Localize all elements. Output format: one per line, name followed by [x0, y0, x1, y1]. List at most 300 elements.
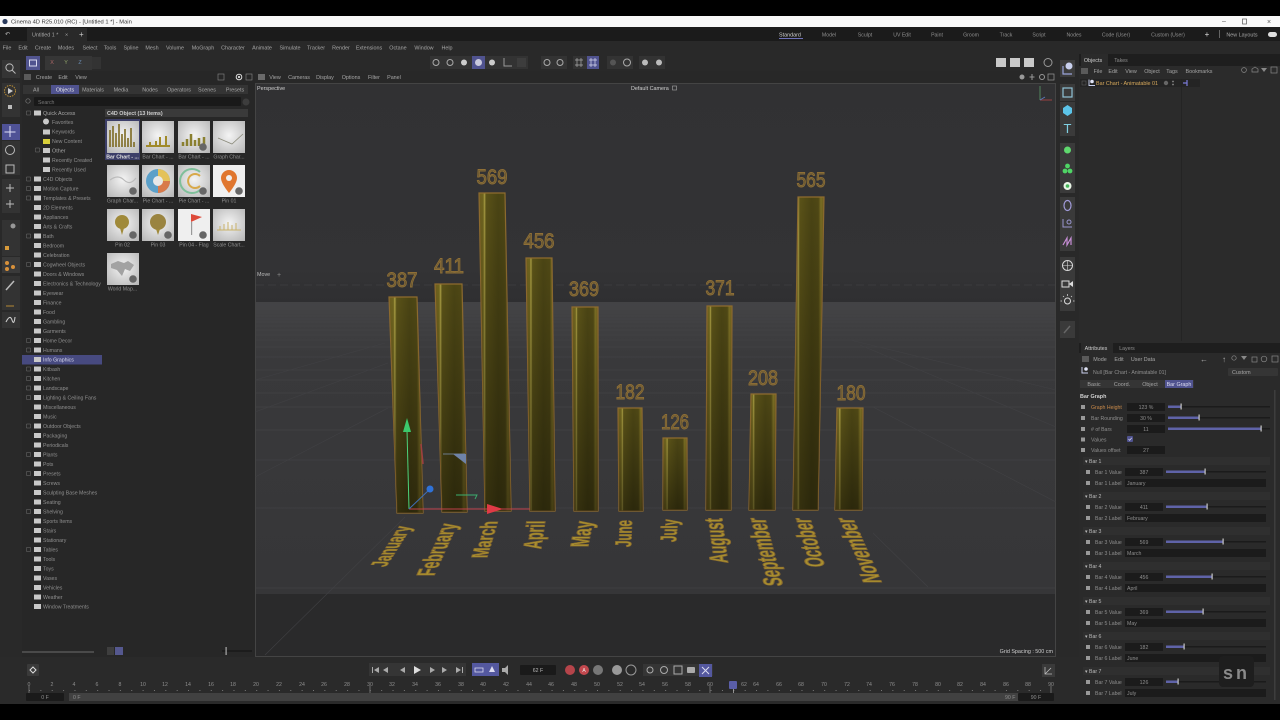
- browser header: Create: [36, 75, 52, 81]
- folder tree: Toys: [43, 566, 54, 572]
- thumbnail grid: Pie Chart - ...: [143, 198, 173, 204]
- section: Bar 4: April: [1127, 586, 1137, 592]
- attributes tabs: [1079, 343, 1280, 353]
- objects tabs: Takes: [1114, 58, 1128, 64]
- attributes menu: User Data: [1131, 357, 1155, 363]
- section: Bar 1: 387: [1140, 470, 1148, 476]
- bar graph parameters: 11: [1143, 427, 1149, 433]
- move gizmo: [403, 418, 530, 514]
- panel: viewport header: Panel: [387, 75, 401, 81]
- menu bar: Render: [332, 46, 350, 52]
- frame ruler: 50: [594, 682, 600, 688]
- scrollbar: [1274, 390, 1276, 700]
- bar values: 456: [524, 230, 554, 253]
- frame ruler: 76: [889, 682, 895, 688]
- browser tabs: Objects: [56, 88, 74, 94]
- folder tree: Food: [43, 310, 55, 316]
- menu bar: Extensions: [356, 46, 382, 52]
- bar graph parameters: [1080, 394, 1270, 454]
- section: Bar 7: ▾ Bar 7: [1085, 669, 1102, 675]
- right mode icon column: [1060, 60, 1075, 338]
- folder tree: Stationary: [43, 538, 67, 544]
- section: Bar 2: Bar 2 Label: [1095, 516, 1122, 522]
- tab and layout bar: +: [79, 30, 84, 39]
- menu bar: Mesh: [145, 46, 159, 52]
- folder tree: 2D Elements: [43, 206, 73, 212]
- frame ruler: 44: [526, 682, 532, 688]
- frame ruler: 40: [480, 682, 486, 688]
- bar graph parameters: 30 %: [1140, 416, 1152, 422]
- section: Bar 5: 369: [1140, 610, 1148, 616]
- bar: April 456: [526, 258, 555, 511]
- frame ruler: 34: [412, 682, 418, 688]
- section: Bar 1: January: [1127, 481, 1146, 487]
- objects menu: Object: [1144, 69, 1160, 75]
- objects menu: View: [1125, 69, 1137, 75]
- bar: June 182: [618, 408, 643, 511]
- panel: viewport header: [255, 71, 1055, 83]
- frame ruler: 58: [685, 682, 691, 688]
- viewport labels: Perspective: [257, 86, 285, 92]
- menu bar: [3, 46, 453, 52]
- viewport labels: Move: [257, 272, 270, 278]
- right mode icon column: T: [1064, 121, 1072, 136]
- section: Bar 6: June: [1127, 656, 1138, 662]
- browser header: [24, 74, 252, 81]
- browser toolbar: Z: [78, 60, 82, 66]
- frame ruler: 2: [51, 682, 54, 688]
- attributes menu: ←: [1200, 355, 1208, 364]
- folder tree: Vehicles: [43, 586, 63, 592]
- section: Bar 2: ▾ Bar 2: [1085, 494, 1102, 500]
- folder tree: Music: [43, 414, 57, 420]
- tab and layout bar: Groom: [963, 32, 979, 38]
- browser tabs: Presets: [226, 88, 244, 94]
- tree expander boxes: [26, 111, 40, 552]
- frame ruler: 12: [162, 682, 168, 688]
- frame ruler: 18: [230, 682, 236, 688]
- frame ruler: 8: [119, 682, 122, 688]
- browser header: Edit: [58, 75, 68, 81]
- menu bar: Window: [414, 46, 434, 52]
- menu bar: Tools: [104, 46, 117, 52]
- bar: January 387: [389, 297, 423, 513]
- month labels: [365, 518, 888, 586]
- attributes tabs: Attributes: [1085, 346, 1108, 352]
- folder tree: Vases: [43, 576, 57, 582]
- attributes menu: Edit: [1114, 357, 1124, 363]
- frame ruler: 78: [912, 682, 918, 688]
- folder tree: Cogwheel Objects: [43, 262, 86, 268]
- attribute tabs row: Coord.: [1114, 382, 1130, 388]
- watermark: [1219, 656, 1254, 687]
- section: Bar 2: February: [1127, 516, 1148, 522]
- tab and layout bar: ×: [65, 32, 68, 38]
- folder tree: Outdoor Objects: [43, 424, 81, 430]
- tab and layout bar: ↶: [5, 31, 10, 38]
- frame ruler: 60: [707, 682, 713, 688]
- section: Bar 3: ▾ Bar 3: [1085, 529, 1102, 535]
- folder tree: Kitbash: [43, 367, 60, 373]
- viewport labels: +: [277, 272, 281, 279]
- month labels: May: [565, 521, 599, 547]
- section: Bar 6: [1083, 632, 1270, 662]
- folder tree: Gambling: [43, 320, 65, 326]
- frame ruler: 6: [96, 682, 99, 688]
- section: Bar 4: [1083, 562, 1270, 592]
- watermark: sn: [1223, 663, 1250, 683]
- browser tabs: All: [33, 88, 39, 94]
- folder tree: Celebration: [43, 253, 70, 259]
- objects menu: [1081, 67, 1277, 75]
- frame ruler: 24: [299, 682, 305, 688]
- menu bar: Simulate: [280, 46, 300, 52]
- section: Bar 6: ▾ Bar 6: [1085, 634, 1102, 640]
- bar: May 369: [572, 307, 598, 511]
- left tool column: [2, 60, 20, 328]
- transport controls: 62 F: [533, 668, 543, 674]
- bar values: 369: [569, 278, 599, 301]
- frame ruler: 56: [662, 682, 668, 688]
- frame ruler: 46: [548, 682, 554, 688]
- frame ruler: 4: [73, 682, 76, 688]
- month labels: November: [829, 518, 888, 583]
- attribute tabs row: Object: [1142, 382, 1158, 388]
- folder tree: Eyewear: [43, 291, 63, 297]
- menu bar: Tracker: [307, 46, 325, 52]
- frame ruler: 88: [1025, 682, 1031, 688]
- folder tree: Recently Created: [52, 158, 92, 164]
- month labels: October: [786, 518, 831, 567]
- thumbnail grid: Pin 02: [115, 242, 130, 248]
- section: Bar 7: Bar 7 Value: [1095, 680, 1122, 686]
- browser header: View: [75, 75, 87, 81]
- section: Bar 5: ▾ Bar 5: [1085, 599, 1102, 605]
- section: Bar 5: Bar 5 Label: [1095, 621, 1122, 627]
- section: Bar 3: March: [1127, 551, 1142, 557]
- section: Bar 1: Bar 1 Label: [1095, 481, 1122, 487]
- frame ruler: 64: [753, 682, 759, 688]
- attributes menu: ↑: [1222, 355, 1226, 364]
- folder tree: Window Treatments: [43, 604, 89, 610]
- bar chart: [365, 166, 888, 586]
- title bar: [0, 16, 1280, 27]
- folder tree: Tables: [43, 548, 58, 554]
- bar graph parameters: Bar Graph: [1080, 394, 1106, 400]
- frame ruler: 66: [776, 682, 782, 688]
- orientation axis: [1040, 86, 1052, 100]
- thumbnail grid: Pin 04 - Flag: [179, 242, 209, 248]
- menu bar: Edit: [18, 46, 28, 52]
- frame range bar: [26, 693, 1054, 701]
- tab and layout bar: Paint: [931, 32, 943, 38]
- frame range bar: 0 F: [41, 695, 49, 701]
- folder tree: Garments: [43, 329, 66, 335]
- browser tabs: Operators: [167, 88, 191, 94]
- folder tree: Packaging: [43, 434, 67, 440]
- tab and layout bar: Custom (User): [1151, 32, 1185, 38]
- panel: objects manager: [1079, 54, 1280, 343]
- folder tree: Bedroom: [43, 244, 64, 250]
- menu bar: Help: [441, 46, 453, 52]
- bar values: 569: [476, 166, 508, 189]
- frame ruler: 54: [639, 682, 645, 688]
- folder tree: Landscape: [43, 386, 68, 392]
- viewport labels: [257, 86, 1053, 655]
- folder tree: Presets: [43, 472, 61, 478]
- frame ruler: 30: [367, 682, 373, 688]
- search field: [26, 97, 249, 106]
- menu bar: Animate: [252, 46, 272, 52]
- bar: July 126: [663, 438, 687, 510]
- frame ruler: 80: [935, 682, 941, 688]
- folder tree: Seating: [43, 500, 61, 506]
- panel: 3D viewport: [255, 83, 1056, 657]
- frame range bar: 0 F: [73, 695, 80, 701]
- frame ruler: 36: [435, 682, 441, 688]
- bar: November 180: [835, 408, 863, 510]
- folder tree: Lighting & Ceiling Fans: [43, 396, 97, 402]
- folder tree: New Content: [52, 139, 83, 145]
- panel: viewport header: Options: [342, 75, 361, 81]
- thumbnail grid: Scale Chart...: [213, 242, 245, 248]
- month labels: June: [611, 520, 637, 547]
- tab and layout bar: Sculpt: [858, 32, 873, 38]
- bar graph parameters: Values: [1091, 438, 1107, 444]
- title bar: –: [1222, 18, 1226, 26]
- tab and layout bar: +: [1205, 30, 1210, 39]
- month labels: March: [467, 521, 503, 558]
- folder tree: Miscellaneous: [43, 405, 76, 411]
- objects tabs: [1079, 54, 1280, 66]
- frame ruler: 0: [28, 682, 31, 688]
- frame ruler: 72: [844, 682, 850, 688]
- tab and layout bar: New Layouts: [1226, 32, 1258, 38]
- search field: Search: [38, 100, 55, 106]
- thumbnail grid: Pin 01: [222, 198, 236, 204]
- object title row: Null [Bar Chart - Animatable 01]: [1093, 370, 1167, 376]
- folder tree: Templates & Presets: [43, 196, 91, 202]
- menu bar: Octane: [389, 46, 407, 52]
- panel: viewport header: View: [269, 75, 281, 81]
- objects menu: Edit: [1108, 69, 1118, 75]
- frame ruler: 22: [276, 682, 282, 688]
- menu bar: MoGraph: [192, 46, 214, 52]
- folder icons: [34, 110, 50, 609]
- frame ruler: 14: [185, 682, 191, 688]
- frame ruler: 26: [321, 682, 327, 688]
- frame ruler: 48: [571, 682, 577, 688]
- folder tree: Periodicals: [43, 443, 69, 449]
- bottom letterbox: [0, 704, 1280, 720]
- folder tree: Shelving: [43, 510, 63, 516]
- browser toolbar: X: [50, 60, 54, 66]
- thumbnail grid: Pin 03: [151, 242, 165, 248]
- folder tree: Other: [52, 148, 66, 154]
- thumbnail grid: Pie Chart - ...: [179, 198, 209, 204]
- section: Bar 6: Bar 6 Value: [1095, 645, 1122, 651]
- tab and layout bar: Untitled 1 *: [32, 32, 59, 38]
- folder tree: Finance: [43, 300, 62, 306]
- bar values: 208: [748, 367, 778, 390]
- tab and layout bar: Code (User): [1102, 32, 1130, 38]
- folder tree: Keywords: [52, 130, 75, 136]
- bar: March 569: [479, 193, 511, 511]
- bar values: 180: [836, 382, 866, 405]
- bar values: [386, 166, 866, 434]
- menu bar: File: [3, 46, 11, 52]
- attributes tabs: Layers: [1119, 346, 1135, 352]
- frame ruler: 10: [140, 682, 146, 688]
- folder tree: Motion Capture: [43, 186, 79, 192]
- month labels: February: [411, 523, 464, 576]
- folder tree: C4D Objects: [43, 177, 73, 183]
- folder tree: Stairs: [43, 528, 57, 534]
- section: Bar 7: [1083, 667, 1270, 697]
- bar values: 565: [796, 169, 826, 192]
- thumbnail grid: C4D Object (13 Items): [107, 111, 163, 117]
- attribute tabs row: Bar Graph: [1167, 382, 1191, 388]
- section: Bar 3: 569: [1140, 540, 1148, 546]
- bar values: 371: [706, 277, 734, 300]
- panel: asset browser: [22, 71, 255, 659]
- attributes menu: Mode: [1093, 357, 1107, 363]
- tab and layout bar: Track: [1000, 32, 1013, 38]
- attribute tabs row: [1080, 380, 1194, 388]
- section: Bar 3: Bar 3 Value: [1095, 540, 1122, 546]
- folder tree: Sports Items: [43, 519, 73, 525]
- object title row: Custom: [1232, 370, 1251, 376]
- transport controls: A: [582, 668, 586, 674]
- section: Bar 6: 182: [1140, 645, 1148, 651]
- new content yellow folder icon: [43, 139, 50, 144]
- thumbnail grid: Graph Char...: [213, 154, 245, 160]
- attributes menu: [1082, 355, 1278, 364]
- section: Bar 6: Bar 6 Label: [1095, 656, 1122, 662]
- menu bar: Volume: [166, 46, 184, 52]
- frame ruler: 70: [821, 682, 827, 688]
- frame ruler: 68: [798, 682, 804, 688]
- folder tree: Bath: [43, 234, 54, 240]
- floor grid: [255, 285, 1056, 655]
- tab and layout bar: UV Edit: [893, 32, 911, 38]
- frame range bar: 90 F: [1031, 695, 1041, 701]
- folder tree: Screws: [43, 481, 60, 487]
- bar values: 387: [386, 269, 418, 292]
- section: Bar 7: 126: [1140, 680, 1148, 686]
- panel: viewport header: Display: [316, 75, 334, 81]
- folder tree: Info Graphics: [43, 358, 74, 364]
- bar graph parameters: Bar Rounding: [1091, 416, 1123, 422]
- thumbnail grid: World Map...: [108, 286, 137, 292]
- folder tree: Appliances: [43, 215, 69, 221]
- menu bar: Character: [221, 46, 245, 52]
- bar values: 126: [661, 411, 689, 434]
- frame ruler: 90: [1048, 682, 1054, 688]
- section: Bar 4: ▾ Bar 4: [1085, 564, 1102, 570]
- section: Bar 4: Bar 4 Value: [1095, 575, 1122, 581]
- frame ruler: 28: [344, 682, 350, 688]
- bar: September 208: [749, 394, 776, 510]
- frame range bar: 90 F: [1005, 695, 1015, 701]
- frame ruler: 62: [741, 682, 747, 688]
- viewport labels: Grid Spacing : 500 cm: [1000, 649, 1053, 655]
- panel: viewport toolbar: [255, 54, 1055, 71]
- bar: October 565: [793, 197, 824, 510]
- section: Bar 2: Bar 2 Value: [1095, 505, 1122, 511]
- section: Bar 4: Bar 4 Label: [1095, 586, 1122, 592]
- keyframe button: [27, 664, 39, 676]
- menu bar: Create: [35, 46, 51, 52]
- tab and layout bar: Script: [1032, 32, 1046, 38]
- folder tree: Quick Access: [43, 111, 76, 117]
- browser tabs: Scenes: [198, 88, 216, 94]
- bar graph parameters: 123 %: [1139, 405, 1154, 411]
- section: Bar 2: [1083, 492, 1270, 522]
- panel: timeline: [0, 657, 1079, 704]
- folder tree: Kitchen: [43, 376, 60, 382]
- frame ruler: 52: [617, 682, 623, 688]
- bar values: 182: [616, 381, 644, 404]
- panel: viewport header: Cameras: [288, 75, 310, 81]
- section: Bar 1: ▾ Bar 1: [1085, 459, 1102, 465]
- section: Bar 4: 456: [1140, 575, 1148, 581]
- frame ruler: 32: [389, 682, 395, 688]
- object title row: [1082, 367, 1278, 376]
- title bar: Cinema 4D R25.010 (RC) - [Untitled 1 *] - Main: [11, 20, 132, 26]
- object row: Bar Chart - Animatable 01: [1096, 81, 1158, 87]
- month labels: July: [656, 519, 683, 542]
- section: Bar 7: Bar 7 Label: [1095, 691, 1122, 697]
- object row: [1080, 79, 1200, 87]
- browser tabs: Nodes: [142, 88, 158, 94]
- bar values: 411: [434, 255, 464, 278]
- folder tree: Pots: [43, 462, 54, 468]
- tab and layout bar: Model: [822, 32, 836, 38]
- month labels: January: [365, 526, 418, 567]
- folder tree: Arts & Crafts: [43, 224, 73, 230]
- frame ruler: 84: [980, 682, 986, 688]
- viewport labels: Default Camera: [631, 86, 669, 92]
- objects menu: Bookmarks: [1186, 69, 1213, 75]
- bar: August 371: [706, 306, 732, 510]
- tab and layout bar: [0, 27, 1280, 41]
- panel: viewport header: Filter: [368, 75, 380, 81]
- folder tree: Home Decor: [43, 338, 72, 344]
- section: Bar 3: Bar 3 Label: [1095, 551, 1122, 557]
- folder tree: Humans: [43, 348, 63, 354]
- section: Bar 5: [1083, 597, 1270, 627]
- menu bar: Modes: [58, 46, 74, 52]
- thumbnail grid: Bar Chart - ...: [106, 154, 139, 160]
- month labels: September: [741, 518, 789, 586]
- frame ruler: 42: [503, 682, 509, 688]
- folder tree: Favorites: [52, 120, 74, 126]
- thumbnail grid: Graph Char...: [107, 198, 138, 204]
- panel: attributes manager: [1079, 343, 1280, 704]
- frame ruler: 20: [253, 682, 259, 688]
- tab and layout bar: Nodes: [1066, 32, 1082, 38]
- section: Bar 5: May: [1127, 621, 1137, 627]
- folder tree: Plants: [43, 452, 58, 458]
- browser footer controls: [22, 647, 252, 655]
- frame ruler: 86: [1003, 682, 1009, 688]
- folder tree: Doors & Windows: [43, 272, 85, 278]
- thumbnail grid: Bar Chart - ...: [178, 154, 210, 160]
- objects tabs: Objects: [1084, 58, 1102, 64]
- bar: February 411: [435, 284, 467, 512]
- objects menu: Tags: [1166, 69, 1178, 75]
